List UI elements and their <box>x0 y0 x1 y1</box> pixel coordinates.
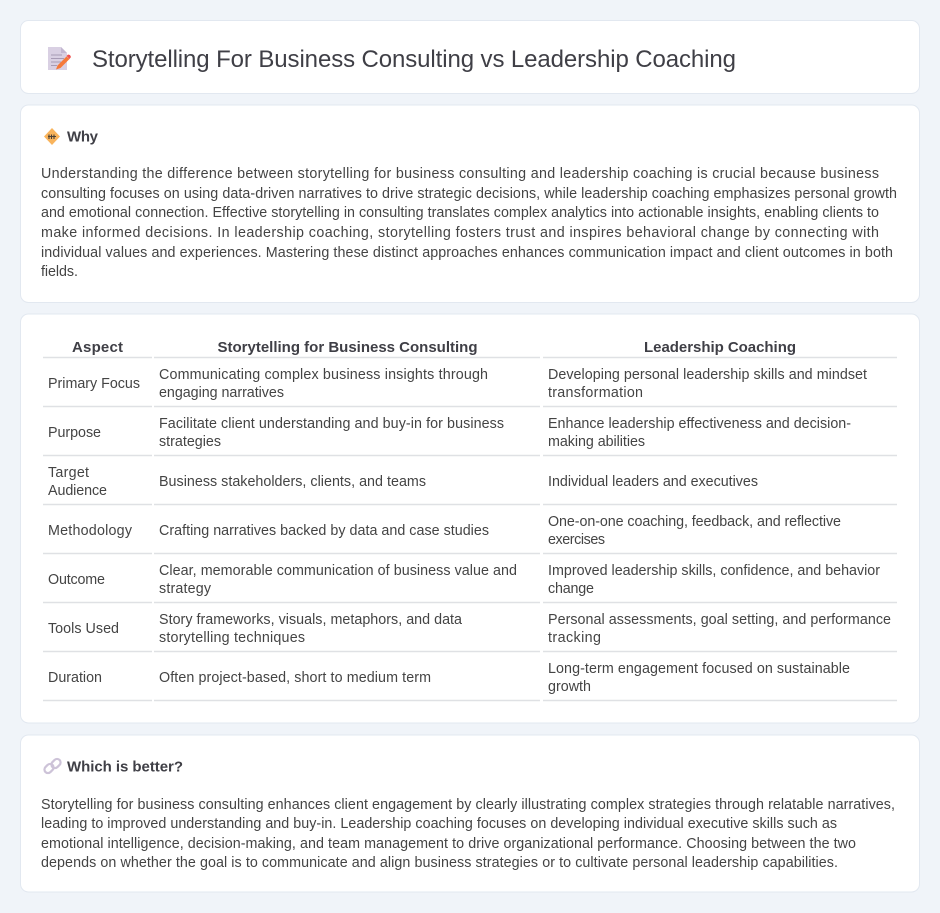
row: tools used: Personal assessments, goal setting, and performance <box>548 612 891 628</box>
row: tools used: storytelling techniques <box>159 630 305 646</box>
row: methodology: Crafting narratives backed by data and case studies <box>159 523 489 539</box>
text block: which is better paragraph: leading to improved understanding and buy-in. Leadership coaching focuses on developing individual executive skills such as <box>41 816 837 832</box>
panel: why <box>20 105 920 302</box>
panel: comparison table <box>20 314 920 723</box>
text block: which is better paragraph: Storytelling for business consulting enhances client engagement by clearly illustrating complex strategies through relatable narratives, <box>41 797 895 813</box>
text block: which is better paragraph: emotional intelligence, decision-making, and team management to drive organizational performance. Choosing between the two <box>41 836 856 852</box>
text block: which is better paragraph: depends on whether the goal is to communicate and align business strategies or to cultivate personal leadership capabilities. <box>41 855 838 871</box>
row: target audience: Audience <box>48 483 107 499</box>
table header: Storytelling for Business Consulting <box>218 339 478 356</box>
row: outcome <box>48 563 880 597</box>
row: tools used <box>48 612 891 646</box>
row: methodology <box>48 514 841 548</box>
row: tools used: Story frameworks, visuals, metaphors, and data <box>159 612 462 628</box>
row: purpose: Purpose <box>48 425 101 441</box>
row: purpose: strategies <box>159 434 221 450</box>
text block: why paragraph: individual values and experiences. Mastering these distinct approaches enhances communication impact and client outcomes in both <box>41 245 893 261</box>
title: Storytelling For Business Consulting vs Leadership Coaching <box>92 46 736 73</box>
table header: Leadership Coaching <box>644 339 796 356</box>
panel: which is better <box>20 735 920 892</box>
row: duration: Long-term engagement focused on sustainable <box>548 661 850 677</box>
row: primary focus: Communicating complex business insights through <box>159 367 488 383</box>
row: primary focus: Developing personal leadership skills and mindset <box>548 367 867 383</box>
row: purpose: making abilities <box>548 434 645 450</box>
text block: which is better paragraph <box>41 797 895 871</box>
row: outcome: change <box>548 581 594 597</box>
heading: which is better: Which is better? <box>67 758 183 776</box>
row: primary focus <box>48 367 867 401</box>
row: purpose <box>48 416 851 450</box>
row: outcome: strategy <box>159 581 212 597</box>
row: methodology: exercises <box>548 532 605 548</box>
text block: why paragraph <box>41 166 897 280</box>
text block: why paragraph: Understanding the difference between storytelling for business consulting and leadership coaching is crucial because business <box>41 166 879 182</box>
row: duration: Often project-based, short to medium term <box>159 670 431 686</box>
row: outcome: Improved leadership skills, confidence, and behavior <box>548 563 880 579</box>
icon: warning diamond <box>44 128 60 145</box>
row: primary focus: Primary Focus <box>48 376 140 392</box>
row: target audience: Business stakeholders, clients, and teams <box>159 474 426 490</box>
text block: why paragraph: fields. <box>41 264 78 280</box>
icon: document with pencil <box>48 47 71 70</box>
table header: Aspect <box>72 339 123 356</box>
row: duration: Duration <box>48 670 102 686</box>
row: duration: growth <box>548 679 591 695</box>
row: duration <box>48 661 850 695</box>
row: primary focus: transformation <box>548 385 643 401</box>
row: methodology: Methodology <box>48 523 133 539</box>
text block: why paragraph: make informed decisions. In leadership coaching, storytelling fosters trust and inspires behavioral change by connecting with <box>41 225 879 241</box>
text block: why paragraph: and emotional connection. Effective storytelling in consulting translates complex analytics into actionable insights, enabling clients to <box>41 205 879 221</box>
row: target audience: Target <box>48 465 89 481</box>
row: outcome: Clear, memorable communication of business value and <box>159 563 517 579</box>
panel: header <box>20 20 920 94</box>
icon: link <box>43 757 62 775</box>
table header <box>72 339 796 356</box>
heading: why: Why <box>67 128 99 146</box>
text block: why paragraph: consulting focuses on using data-driven narratives to drive strategic decisions, while leadership coaching emphasizes personal growth <box>41 186 897 202</box>
row: purpose: Enhance leadership effectiveness and decision- <box>548 416 851 432</box>
row: purpose: Facilitate client understanding and buy-in for business <box>159 416 504 432</box>
row: target audience: Individual leaders and executives <box>548 474 758 490</box>
row: tools used: tracking <box>548 630 601 646</box>
row: primary focus: engaging narratives <box>159 385 284 401</box>
row: methodology: One-on-one coaching, feedback, and reflective <box>548 514 841 530</box>
row: outcome: Outcome <box>48 572 105 588</box>
row: target audience <box>48 465 758 499</box>
row: tools used: Tools Used <box>48 621 119 637</box>
